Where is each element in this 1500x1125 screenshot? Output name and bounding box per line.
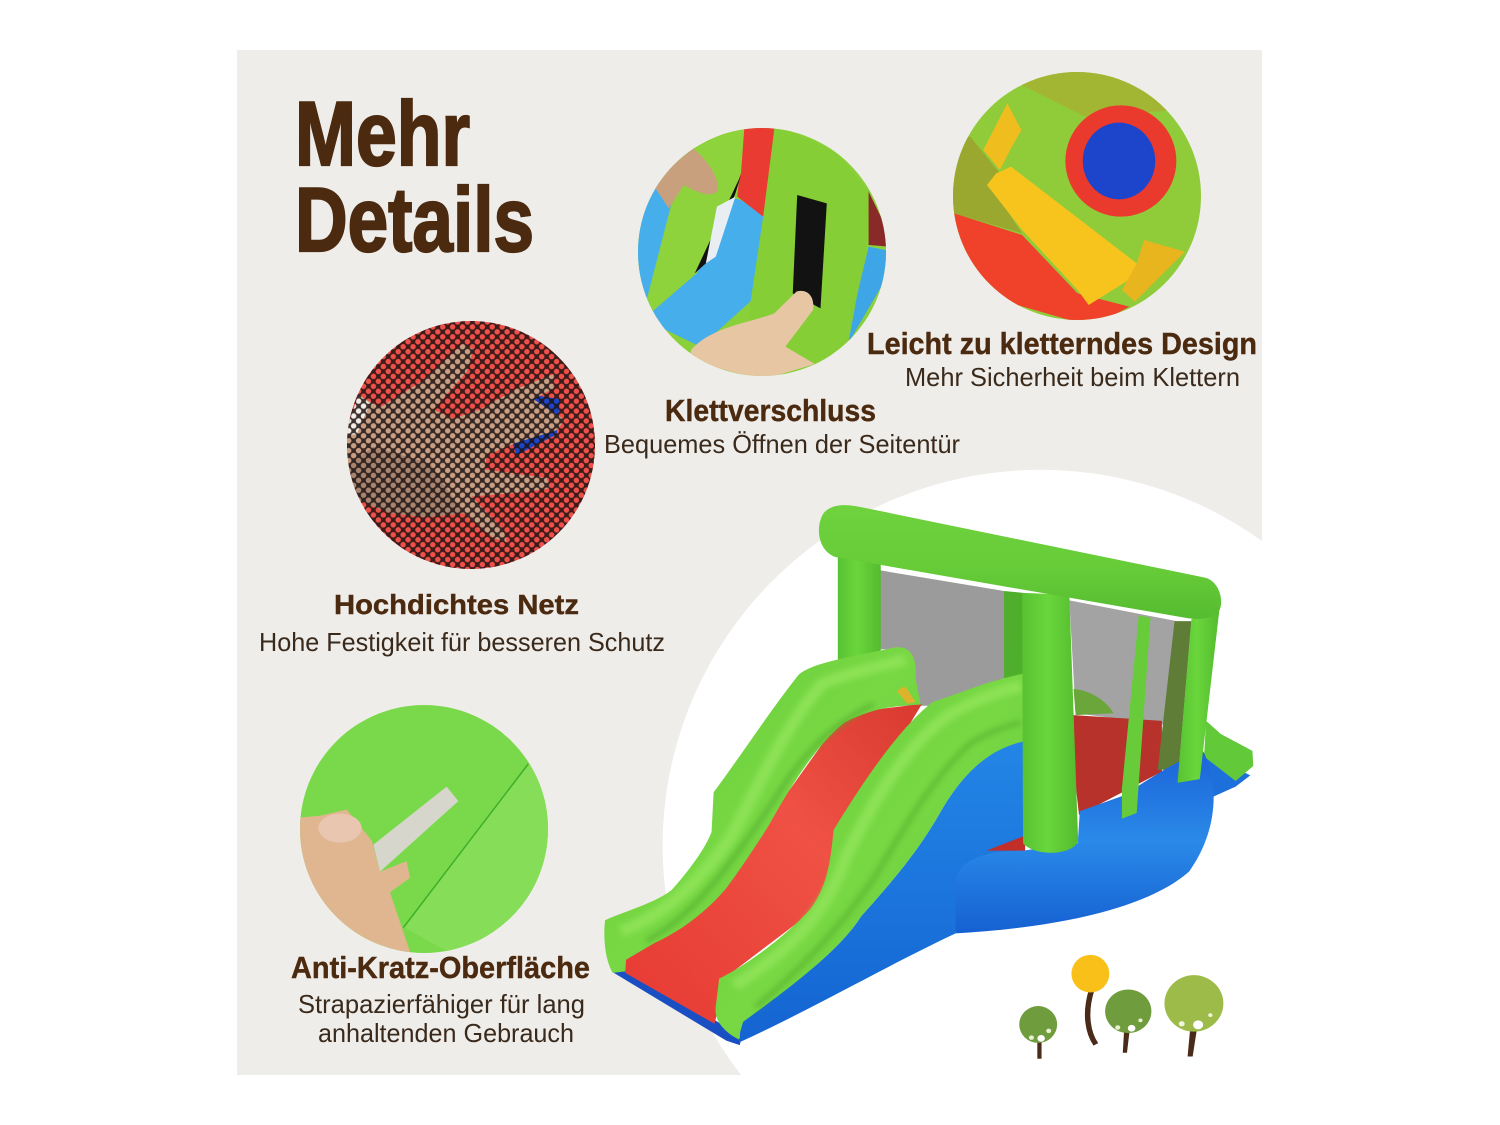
- left rail: [604, 647, 921, 973]
- caption: net: Hohe Festigkeit für besseren Schutz: [259, 627, 665, 657]
- photo: climbing handle: [948, 67, 1207, 327]
- inflatable bounce house with slide: [604, 505, 1253, 1045]
- red slide surface: [625, 704, 922, 1024]
- photo: scratch resistant fabric with key: [297, 702, 553, 957]
- red small floor: [986, 836, 1025, 851]
- mesh wall right: [1069, 600, 1177, 725]
- red inner floor: [1074, 715, 1162, 815]
- mesh wall left: [880, 570, 1023, 706]
- background panel: [237, 50, 1262, 1075]
- green inner back: [1074, 689, 1114, 715]
- caption: scratch resistant: Strapazierfähiger für lang: [298, 989, 585, 1019]
- tree medium: [1105, 989, 1151, 1053]
- photo: high density net: [343, 318, 603, 575]
- caption: climbing design: Mehr Sicherheit beim Klettern: [905, 362, 1240, 392]
- caption: net: [259, 589, 665, 657]
- caption: climbing design: [867, 326, 1257, 392]
- right rail: [716, 674, 1023, 1040]
- right pillar: [1178, 608, 1220, 783]
- valve: [897, 686, 916, 704]
- caption: net: Hochdichtes Netz: [334, 589, 579, 620]
- caption: Velcro: [604, 393, 960, 459]
- caption: scratch resistant: Anti-Kratz-Oberfläche: [291, 950, 590, 985]
- middle back pillar: [1004, 591, 1023, 683]
- top bar: [819, 505, 1221, 619]
- blue body: [739, 740, 1025, 1043]
- net mesh overlay: [347, 321, 595, 569]
- green strap: [1122, 615, 1151, 819]
- tree small: [1019, 1006, 1057, 1059]
- middle pillar: [1022, 593, 1078, 853]
- caption: scratch resistant: anhaltenden Gebrauch: [318, 1018, 574, 1048]
- tree yellow: [1071, 955, 1109, 1044]
- net panel right: [1158, 621, 1191, 770]
- base sheet: [613, 969, 741, 1045]
- tree large: [1164, 975, 1223, 1056]
- left pillar: [838, 555, 881, 664]
- caption: Velcro: Klettverschluss: [665, 393, 876, 428]
- caption: scratch resistant: [291, 950, 590, 1048]
- back slide end: [1200, 721, 1253, 800]
- title: Details: [295, 170, 534, 271]
- caption: climbing design: Leicht zu kletterndes Design: [867, 326, 1257, 361]
- title: Mehr: [295, 84, 470, 185]
- photo: Velcro side door: [638, 128, 886, 376]
- blue tub: [956, 749, 1214, 933]
- title: [295, 84, 534, 271]
- caption: Velcro: Bequemes Öffnen der Seitentür: [604, 429, 960, 459]
- decorative trees: [1019, 955, 1223, 1059]
